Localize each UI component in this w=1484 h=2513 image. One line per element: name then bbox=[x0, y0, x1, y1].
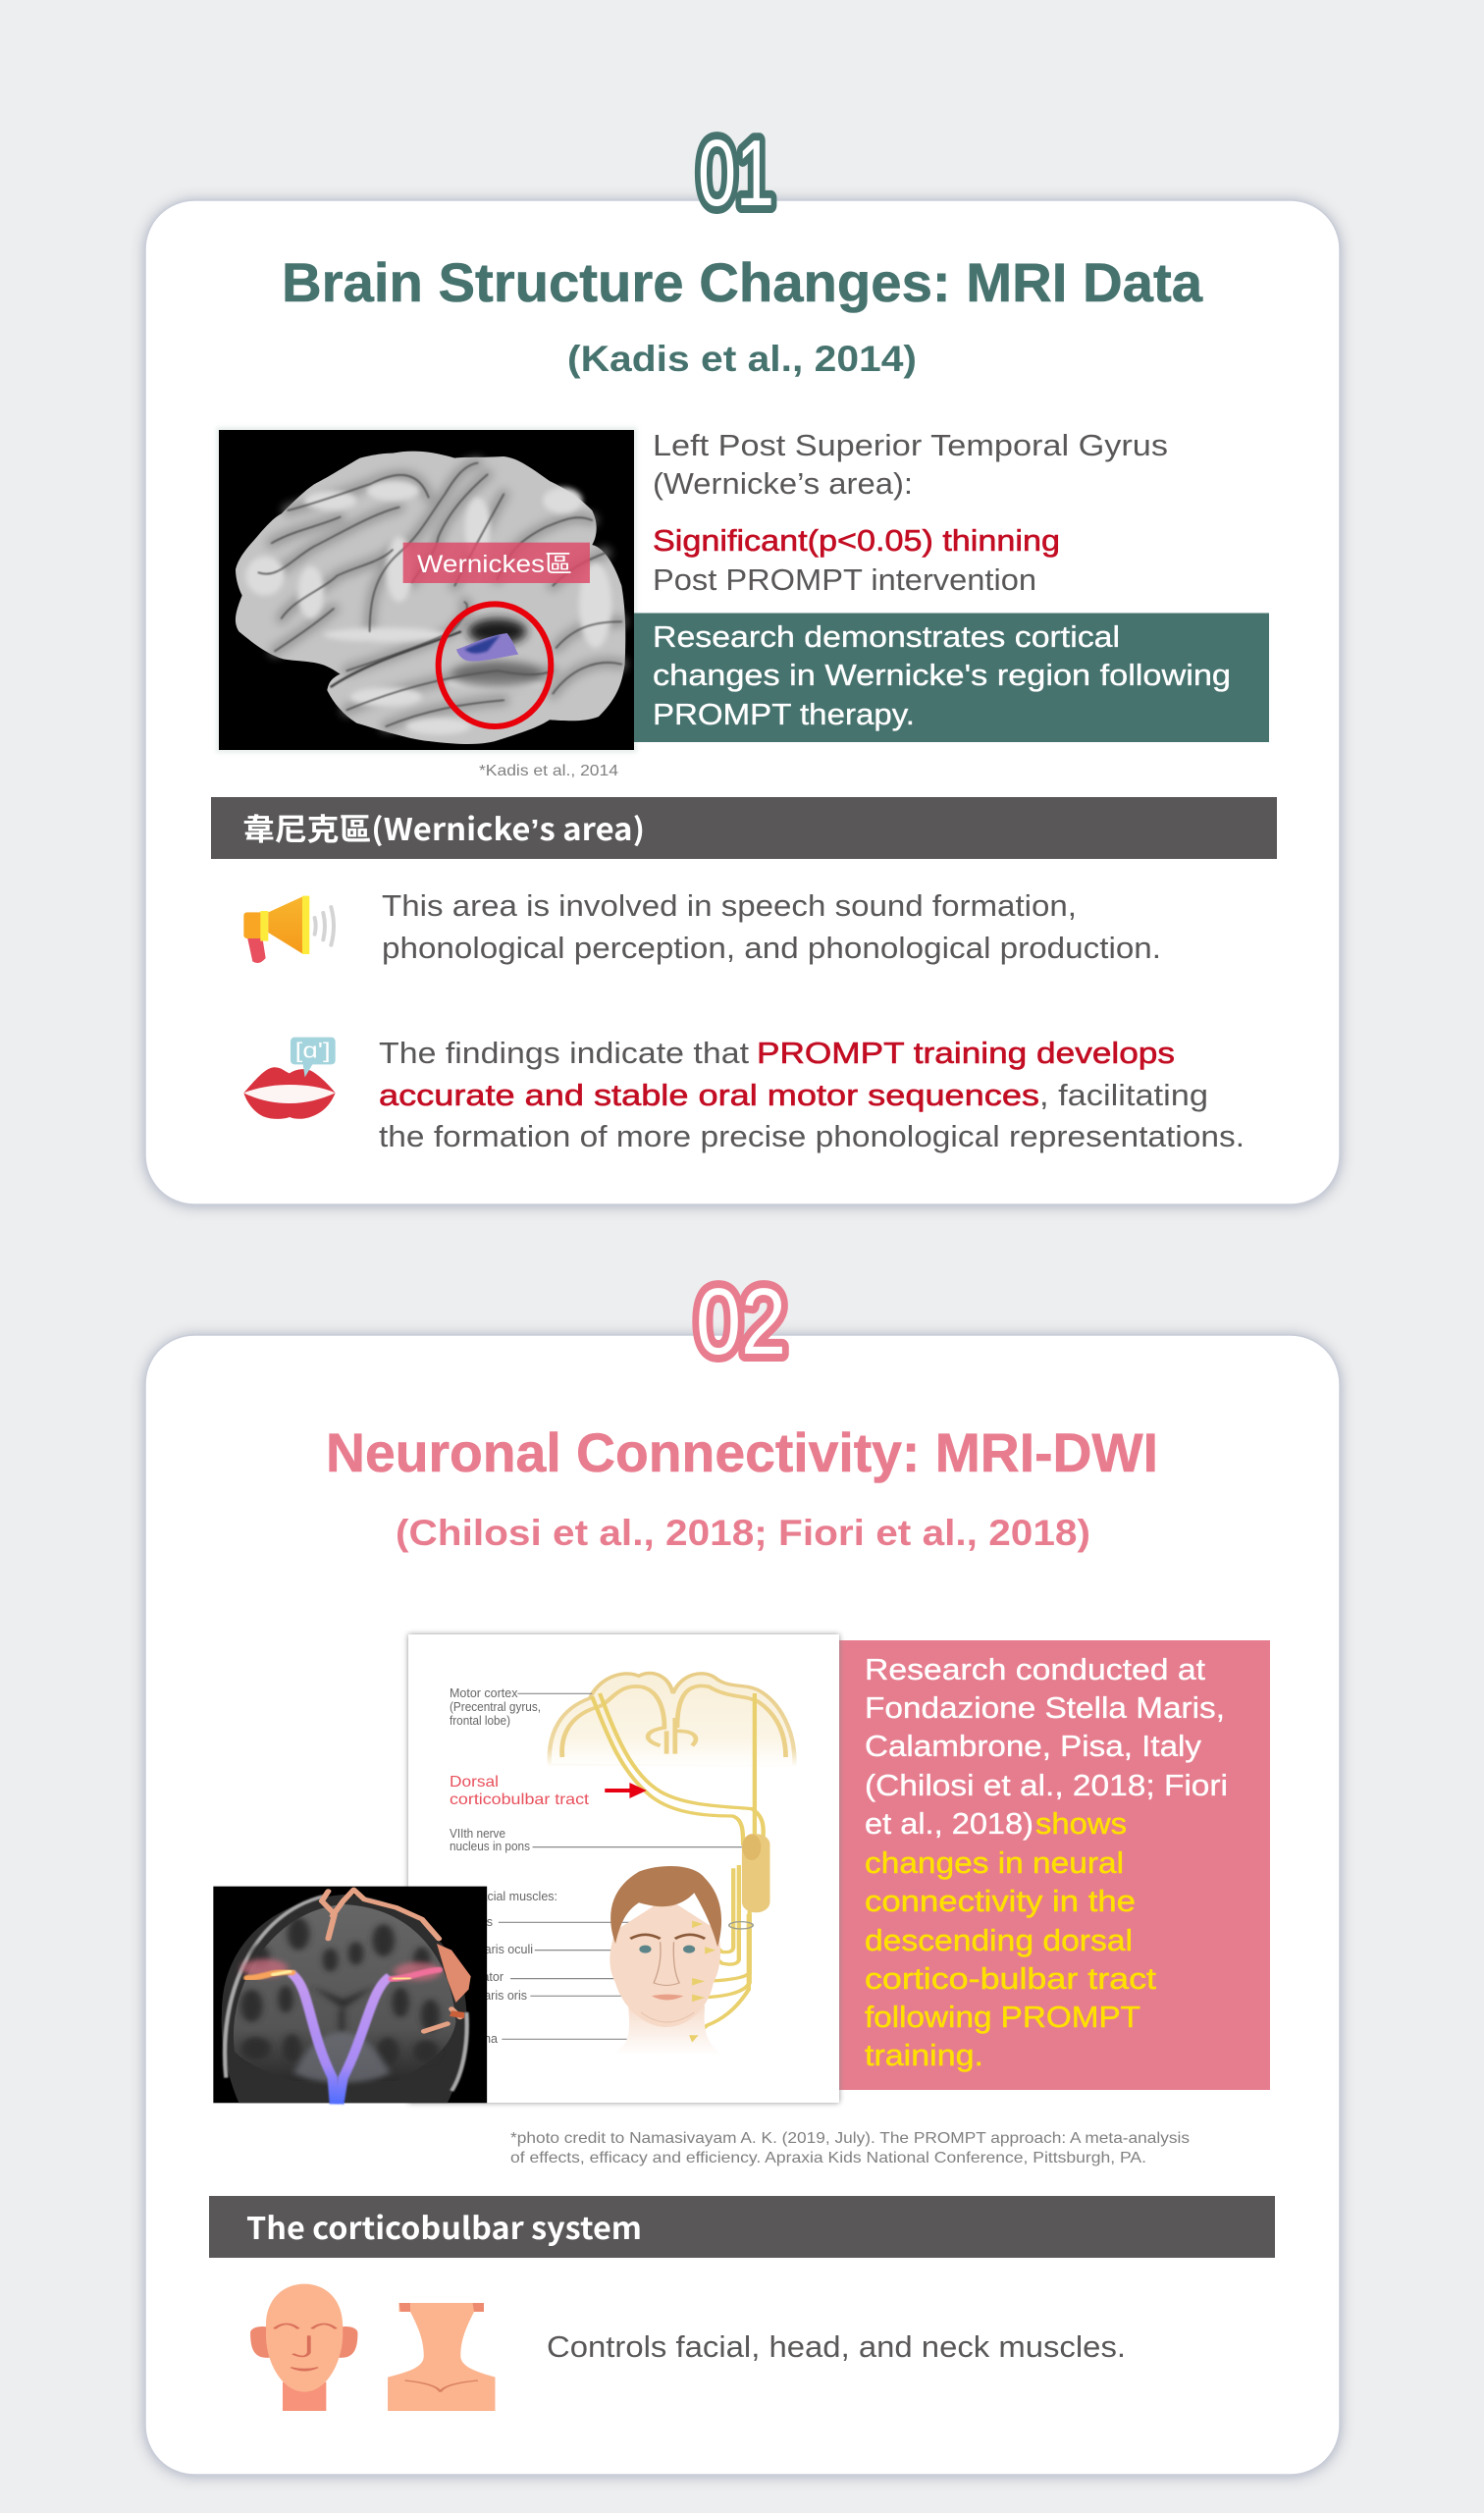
text block: speech sound formation: phonological perception, and phonological production. bbox=[382, 931, 1161, 965]
heading: brain structure changes: Brain Structure Changes: MRI Data bbox=[282, 251, 1203, 313]
card background 1 bbox=[145, 200, 1340, 1204]
face nerve arrows bbox=[689, 1921, 716, 2043]
callout: research at Fondazione Stella Maris: Research conducted at bbox=[865, 1652, 1205, 1686]
text block: PROMPT training findings: the formation of more precise phonological representations. bbox=[379, 1119, 1245, 1153]
text block: Wernicke's area location: Post PROMPT intervention bbox=[653, 562, 1036, 597]
diagram: corticobulbar tract anatomy: VIIth nerve bbox=[450, 1827, 505, 1841]
section bar: Wernicke's area bbox=[211, 797, 1277, 859]
diagram: corticobulbar tract anatomy: Orbicularis oculi bbox=[446, 1943, 533, 1956]
diagram: corticobulbar tract anatomy: Facial muscles: bbox=[473, 1890, 557, 1903]
brain MRI image bbox=[216, 427, 637, 753]
text block: speech sound formation bbox=[382, 888, 1161, 965]
cortex bbox=[550, 1673, 794, 1767]
diagram: corticobulbar tract anatomy: Motor cortex bbox=[450, 1686, 518, 1700]
photo credit bbox=[510, 2130, 1190, 2166]
icon: neck bbox=[388, 2303, 495, 2411]
callout: research findings: Research demonstrates cortical bbox=[653, 619, 1120, 654]
text block: Wernicke's area location: Significant(p<0.05) thinning bbox=[653, 523, 1060, 558]
icon: face bbox=[250, 2284, 357, 2411]
panel: neuronal connectivity bbox=[145, 1269, 1340, 2475]
pointer lines bbox=[499, 1693, 742, 2039]
text block: corticobulbar function: Controls facial, head, and neck muscles. bbox=[547, 2329, 1126, 2364]
diagram: corticobulbar tract anatomy: Orbicularis oris bbox=[446, 1989, 527, 2003]
callout: research at Fondazione Stella Maris: connectivity in the bbox=[865, 1884, 1136, 1918]
callout: research at Fondazione Stella Maris: cortico-bulbar tract bbox=[865, 1961, 1156, 1996]
callout: research at Fondazione Stella Maris: following PROMPT bbox=[865, 2000, 1140, 2034]
callout: research at Fondazione Stella Maris: Calambrone, Pisa, Italy bbox=[865, 1729, 1202, 1763]
text block: PROMPT training findings: PROMPT training develops bbox=[757, 1036, 1175, 1070]
text block: Wernicke's area location bbox=[653, 428, 1168, 597]
diagram: corticobulbar tract anatomy: frontal lobe) bbox=[450, 1714, 510, 1728]
section bar: Wernicke's area: 韋尼克區(Wernicke ’s area) bbox=[242, 805, 645, 849]
face bbox=[611, 2005, 724, 2055]
callout: research at Fondazione Stella Maris: descending dorsal bbox=[865, 1923, 1133, 1957]
text block: PROMPT training findings: , facilitating bbox=[1039, 1078, 1208, 1112]
diagram: corticobulbar tract anatomy: Frontalis bbox=[446, 1915, 493, 1929]
callout: research findings bbox=[634, 613, 1269, 742]
text block: PROMPT training findings: accurate and stable oral motor sequences bbox=[379, 1078, 1039, 1112]
callout: research at Fondazione Stella Maris: shows bbox=[1035, 1806, 1127, 1841]
diagram: corticobulbar tract anatomy bbox=[408, 1634, 839, 2103]
section bar: corticobulbar system bbox=[209, 2196, 1275, 2258]
heading: neuronal connectivity: Neuronal Connectivity: MRI-DWI bbox=[326, 1421, 1158, 1483]
diagram: corticobulbar tract anatomy: (Precentral gyrus, bbox=[450, 1700, 541, 1714]
diagram: corticobulbar tract anatomy: corticobulbar tract bbox=[450, 1791, 590, 1808]
text block: PROMPT training findings: The findings indicate that bbox=[379, 1036, 749, 1070]
diagram: corticobulbar tract anatomy: Levator bbox=[462, 1970, 504, 1984]
callout: research at Fondazione Stella Maris bbox=[839, 1640, 1270, 2090]
image: DWI tractography scan bbox=[213, 1887, 487, 2104]
text block: Wernicke's area location: Left Post Superior Temporal Gyrus bbox=[653, 428, 1168, 462]
citation: Kadis: (Kadis et al., 2014) bbox=[567, 339, 917, 379]
brain label: Wernickes區 bbox=[417, 551, 572, 578]
image credit: *Kadis et al., 2014 bbox=[479, 763, 618, 779]
icon: megaphone bbox=[243, 896, 334, 963]
photo credit: *photo credit to Namasivayam A. K. (2019, July). The PROMPT approach: A meta-analysis bbox=[510, 2130, 1190, 2147]
text block: Wernicke's area location: (Wernicke’s area): bbox=[653, 466, 913, 501]
section number 02: 02 bbox=[696, 1269, 786, 1374]
callout: research at Fondazione Stella Maris: et al., 2018) bbox=[865, 1806, 1034, 1841]
panel: brain structure changes bbox=[145, 121, 1340, 1204]
diagram: corticobulbar tract anatomy: Dorsal bbox=[450, 1774, 499, 1791]
red arrow bbox=[605, 1783, 647, 1798]
callout: research at Fondazione Stella Maris: (Chilosi et al., 2018; Fiori bbox=[865, 1768, 1228, 1802]
callout: research at Fondazione Stella Maris: training. bbox=[865, 2038, 983, 2072]
callout: research at Fondazione Stella Maris: Fondazione Stella Maris, bbox=[865, 1690, 1225, 1725]
photo credit: of effects, efficacy and efficiency. Apraxia Kids National Conference, Pittsburgh, PA. bbox=[510, 2150, 1146, 2166]
text block: speech sound formation: This area is involved in speech sound formation, bbox=[382, 888, 1077, 923]
icon: lips with speech bubble: [ɑ'] bbox=[295, 1038, 331, 1062]
tracts bbox=[592, 1693, 764, 2039]
diagram: corticobulbar tract anatomy: Platysma bbox=[448, 2032, 498, 2046]
diagram: corticobulbar tract anatomy: nucleus in pons bbox=[450, 1840, 530, 1853]
section number 01: 01 bbox=[698, 121, 774, 226]
section bar: corticobulbar system: The corticobulbar system bbox=[246, 2204, 642, 2248]
card background 2 bbox=[145, 1335, 1340, 2475]
citation: Chilosi and Fiori: (Chilosi et al., 2018; Fiori et al., 2018) bbox=[396, 1513, 1090, 1553]
callout: research findings: PROMPT therapy. bbox=[653, 697, 915, 731]
text block: PROMPT training findings bbox=[379, 1036, 1245, 1153]
icon: lips with speech bubble bbox=[243, 1038, 336, 1119]
callout: research at Fondazione Stella Maris: changes in neural bbox=[865, 1845, 1124, 1880]
callout: research findings: changes in Wernicke's region following bbox=[653, 658, 1231, 692]
